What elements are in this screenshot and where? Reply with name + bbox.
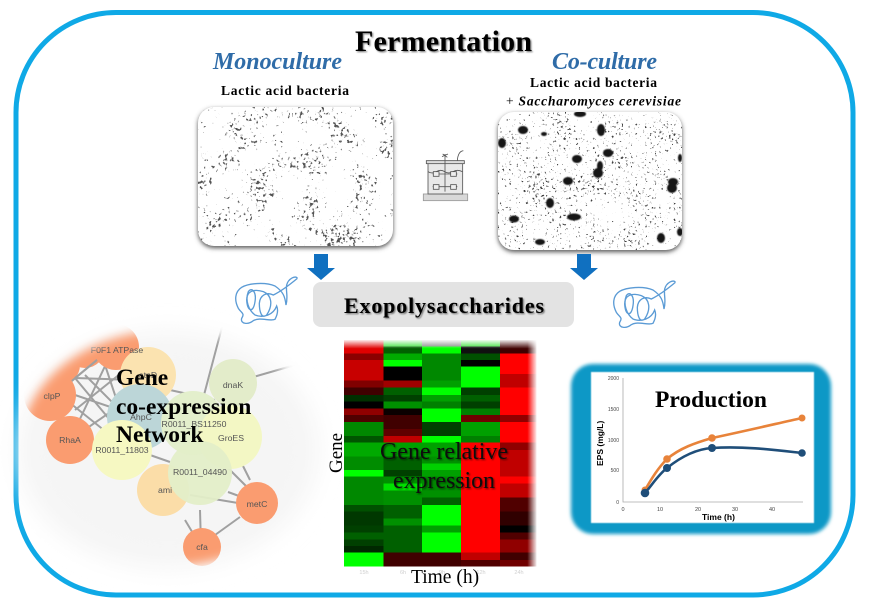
panel: gene co-expression network: RhaA [59, 435, 81, 445]
label: production: Production [655, 387, 767, 413]
column 12h [461, 340, 500, 567]
label: monoculture organism: Lactic acid bacteria [221, 83, 349, 98]
axis ticks: sampling times: 9h [439, 570, 445, 576]
panel: exopolysaccharides [313, 282, 574, 327]
panel: gene co-expression network: atpD [139, 370, 157, 380]
panel: production chart [571, 364, 831, 534]
label: network title [116, 365, 251, 448]
column 6h [383, 340, 422, 567]
panel: gene co-expression network: metC [247, 499, 267, 509]
arrow: monoculture to EPS [307, 254, 335, 280]
column 24h [500, 340, 537, 567]
label: network title: Gene [116, 365, 168, 391]
label: heatmap title: expression [393, 468, 495, 494]
heading: co-culture: Co-culture [552, 49, 657, 75]
panel: gene co-expression network: R0011_BS11250 [162, 419, 227, 429]
line chart: 20 [695, 507, 701, 513]
line chart: 2000 [608, 376, 619, 382]
icon: bioreactor [423, 151, 468, 201]
axis ticks: sampling times [359, 570, 524, 576]
line chart: 10 [657, 507, 663, 513]
line chart: 1000 [608, 438, 619, 444]
panel: gene co-expression network: R0011_04490 [173, 467, 227, 477]
panel: gene co-expression network: AhpC [130, 412, 152, 422]
panel: gene co-expression network: ami [158, 485, 172, 495]
axis ticks: sampling times: 12h [476, 570, 486, 576]
label: heatmap title [380, 439, 508, 494]
axis label: time: Time (h) [411, 567, 479, 588]
panel: gene co-expression network: F0F1 ATPase [91, 345, 143, 355]
arrow: co-culture to EPS [570, 254, 598, 280]
panel: gene co-expression network [18, 324, 318, 568]
title: Fermentation [355, 25, 532, 58]
panel: co-culture micrograph [498, 111, 683, 252]
label: yeast species: + Saccharomyces cerevisiae [506, 94, 681, 108]
label: network title: co-expression [116, 394, 251, 420]
column 9h [422, 340, 461, 567]
panel: gene co-expression network: cfa [196, 542, 208, 552]
axis ticks: sampling times: 15h [359, 570, 369, 576]
line chart: 0 [616, 500, 619, 506]
panel: gene co-expression network: dnaK [223, 380, 243, 390]
axis label: gene: Gene [326, 433, 347, 473]
panel: gene co-expression network: R0011_11803 [95, 445, 149, 455]
line chart: Time (h) [702, 512, 735, 522]
column 15h [344, 340, 383, 567]
line chart: 0 [621, 507, 625, 513]
line chart: 500 [611, 468, 619, 474]
panel: gene co-expression network: clpP [44, 391, 61, 401]
line chart: 1500 [608, 407, 619, 413]
line chart: 30 [732, 507, 738, 513]
label: heatmap title: Gene relative [380, 439, 508, 465]
heading: monoculture: Monoculture [212, 49, 342, 75]
axis ticks: sampling times: 24h [514, 570, 524, 576]
panel: monoculture micrograph [198, 107, 393, 248]
line chart: EPS (mg/L) [595, 420, 605, 466]
panel: exopolysaccharides: Exopolysaccharides [344, 293, 544, 318]
line chart: 40 [769, 507, 775, 513]
heatmap: gene relative expression [340, 339, 540, 567]
icon: polysaccharide coil left [236, 277, 297, 323]
icon: polysaccharide coil right [614, 281, 675, 327]
panel: gene co-expression network: GroES [218, 433, 244, 443]
line chart [595, 376, 806, 522]
axis ticks: sampling times: 6h [400, 570, 406, 576]
label: network title: Network [116, 422, 204, 448]
label: co-culture organisms: Lactic acid bacteria [530, 75, 657, 90]
